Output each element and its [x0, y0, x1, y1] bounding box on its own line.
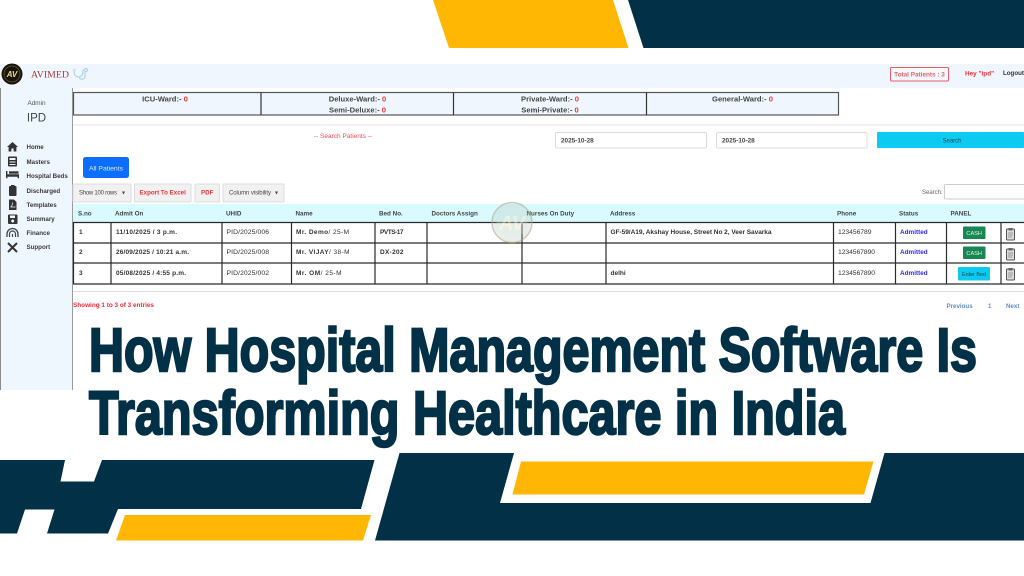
top yellow banner shape	[433, 0, 628, 48]
menu: Support: Support	[26, 244, 50, 251]
row 2: PID/2025/008	[226, 249, 269, 256]
IPD label: IPD	[27, 112, 46, 124]
button: column visibility	[223, 184, 284, 202]
bottom left navy shape	[0, 460, 374, 534]
pagination: 1	[988, 303, 992, 310]
row 3: 1234567890	[838, 270, 875, 277]
table info text: Showing 1 to 3 of 3 entries	[73, 302, 154, 309]
table search field: Search:	[922, 190, 943, 196]
row 3: PID/2025/002	[226, 270, 269, 277]
date input: to	[716, 132, 867, 148]
total patients badge	[890, 68, 948, 81]
brand name: AVIMED	[31, 70, 69, 80]
header bar	[0, 64, 1024, 88]
menu: Support	[8, 243, 50, 252]
table header: PANEL	[950, 210, 972, 218]
menu: Masters	[8, 156, 50, 166]
button: export	[134, 184, 191, 202]
row 1: GF-59/A19, Akshay House, Street No 2, Veer Savarka	[610, 229, 772, 236]
badge: cash row 1: CASH	[966, 231, 982, 237]
table search field	[922, 184, 1024, 199]
row 3: 05/08/2025 / 4:55 p.m.	[116, 270, 186, 277]
ward: Deluxe: Semi-Deluxe:- 0	[329, 105, 386, 114]
icon: clipboard row 3	[1006, 268, 1014, 280]
ward: General: General-Ward:- 0	[712, 94, 773, 104]
search button	[877, 132, 1024, 148]
badge: enter bed	[958, 267, 990, 280]
menu: Masters: Masters	[26, 159, 50, 166]
title	[89, 316, 977, 447]
row 2: 26/09/2025 / 10:21 a.m.	[116, 249, 189, 256]
software screenshot	[0, 64, 1024, 390]
row 3: Mr. OM/ 25-M	[296, 270, 342, 277]
menu: Home	[7, 142, 44, 152]
table header: Phone	[837, 210, 857, 218]
row 3: 3	[79, 270, 83, 277]
panel: sidebar	[0, 88, 73, 390]
icon: clipboard row 2	[1006, 248, 1014, 260]
pagination	[946, 303, 1019, 310]
row 2: 2	[79, 249, 83, 256]
admin label: Admin	[27, 100, 46, 107]
menu: Summary	[8, 214, 55, 224]
table header: Doctors Assign	[432, 210, 478, 218]
row 3: Admitted	[900, 270, 928, 277]
search heading: -- Search Patients --	[314, 133, 372, 140]
table header: Status	[899, 210, 919, 218]
button: pdf: PDF	[201, 190, 214, 196]
ward: Deluxe	[329, 94, 386, 114]
badge: cash row 1	[963, 226, 986, 239]
table toolbar	[73, 184, 1024, 202]
user greeting: Hey "ipd"	[965, 70, 994, 78]
table header: Admit On	[115, 210, 143, 218]
table header: Nurses On Duty	[526, 210, 575, 218]
row 2: Admitted	[900, 249, 928, 256]
all patients tab	[83, 157, 129, 178]
ward: ICU: ICU-Ward:- 0	[142, 94, 188, 104]
table header: UHID	[226, 210, 242, 218]
menu: Hospital Beds	[6, 171, 68, 180]
row 1: PVTS-17	[380, 229, 404, 236]
button: export: Export To Excel	[140, 190, 186, 196]
row 1	[79, 229, 928, 236]
ward: Deluxe: Deluxe-Ward:- 0	[329, 94, 386, 104]
row 1: 123456789	[838, 229, 872, 236]
total patients badge: Total Patients : 3	[894, 72, 945, 78]
table header: Bed No.	[379, 210, 403, 218]
menu: Finance: Finance	[26, 230, 50, 237]
badge: cash row 2: CASH	[966, 251, 982, 257]
menu: Hospital Beds: Hospital Beds	[26, 173, 68, 180]
panel: ward summary	[74, 92, 838, 115]
row 2: DX-202	[380, 249, 404, 256]
row 1: 11/10/2025 / 3 p.m.	[116, 229, 177, 236]
table header: Name	[296, 210, 313, 218]
logout link: Logout	[1003, 70, 1024, 77]
patients table	[73, 204, 1024, 284]
row 1: 1	[79, 229, 83, 236]
pagination: Previous	[946, 303, 973, 310]
table header	[73, 204, 1024, 222]
button: column visibility: ▾	[275, 190, 278, 196]
row 2: 1234567890	[838, 249, 875, 256]
white frame around yellow bar	[500, 453, 884, 503]
search form	[314, 132, 1024, 148]
bottom right yellow bar	[512, 462, 874, 494]
bottom right navy shape	[375, 453, 1024, 540]
menu: Summary: Summary	[26, 216, 55, 223]
ward: Private: Semi-Private:- 0	[521, 105, 579, 114]
row 1: Admitted	[900, 229, 928, 236]
date input: from: 2025-10-28	[561, 138, 594, 144]
icon: clipboard row 1	[1006, 228, 1014, 240]
menu: Finance	[7, 228, 50, 237]
button: show rows	[73, 184, 131, 202]
ward: Private: Private-Ward:- 0	[521, 94, 579, 104]
badge: enter bed: Enter Bed	[962, 272, 986, 278]
menu: Templates	[9, 200, 57, 210]
bottom left yellow bar	[116, 515, 371, 540]
button: show rows: Show 100 rows	[79, 190, 117, 196]
pagination: Next	[1006, 303, 1019, 310]
row 2: Mr. VIJAY/ 38-M	[296, 249, 350, 256]
badge: cash row 2	[963, 246, 986, 259]
date input: to: 2025-10-28	[722, 138, 755, 144]
date input: from	[556, 132, 706, 148]
ward: Private	[521, 94, 579, 114]
table grid	[73, 222, 1024, 284]
button: column visibility: Column visibility	[229, 190, 271, 196]
all patients tab: All Patients	[89, 166, 124, 172]
icon: Avimed logo	[2, 64, 22, 84]
row 1: Mr. Demo/ 25-M	[296, 229, 349, 236]
icon: stethoscope	[73, 68, 88, 79]
menu: Templates: Templates	[26, 202, 57, 209]
title line 2: Transforming Healthcare in India	[89, 379, 846, 447]
row 1: PID/2025/006	[226, 229, 269, 236]
top navy banner shape	[628, 0, 1024, 48]
watermark logo: AV	[498, 213, 527, 235]
watermark logo	[492, 202, 532, 242]
icon: Avimed logo: AV	[6, 70, 18, 79]
table header: Address	[610, 210, 636, 218]
menu: Home: Home	[26, 144, 44, 151]
table header: S.no	[78, 210, 92, 218]
row 3: delhi	[610, 270, 626, 277]
search button: Search	[942, 138, 962, 144]
menu: Discharged: Discharged	[26, 188, 60, 195]
menu: Discharged	[9, 185, 60, 196]
row 3	[79, 270, 928, 277]
button: show rows: ▾	[122, 190, 125, 196]
row 2	[79, 249, 928, 256]
button: pdf	[195, 184, 220, 202]
